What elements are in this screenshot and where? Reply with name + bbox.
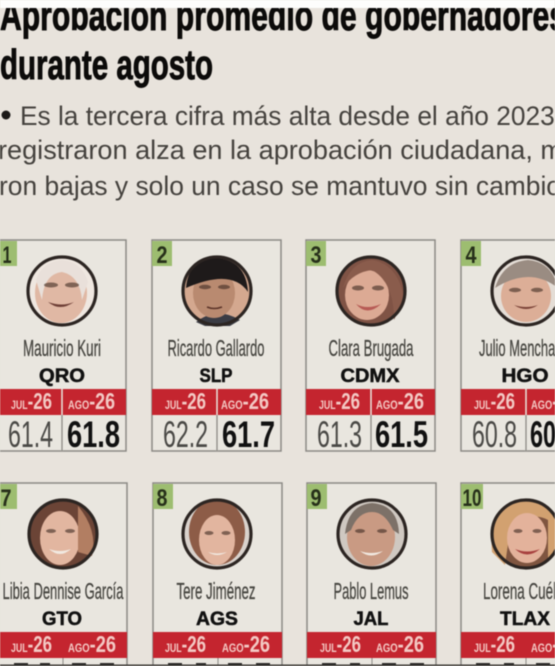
panel: rank 2 Ricardo Gallardo: SLP — [200, 366, 233, 387]
panel: rank 10 Lorena Cuéllar: JUL-26 — [474, 631, 515, 657]
icon: portrait Lorena Cuéllar — [492, 500, 555, 568]
panel: rank 2 Ricardo Gallardo: 2 — [156, 242, 168, 269]
panel: rank 3 Clara Brugada: 61.5 — [375, 414, 428, 455]
panel: rank 9 Pablo Lemus: 9 — [310, 485, 322, 512]
panel: rank 1 Mauricio Kuri: AGO-26 — [68, 388, 115, 414]
title: durante agosto — [0, 41, 213, 88]
panel: rank 4 Julio Menchaca: 60.8 — [472, 414, 517, 455]
panel: rank 8 Tere Jiménez: Tere Jiménez — [176, 578, 256, 604]
panel: rank 8 Tere Jiménez: AGS — [196, 609, 238, 630]
panel: rank 8 Tere Jiménez — [153, 483, 282, 666]
panel: rank 7 Libia Dennise García: JUL-26 — [11, 631, 52, 657]
panel: rank 8 Tere Jiménez: JUL-26 — [165, 631, 206, 657]
icon: portrait Julio Menchaca — [492, 257, 555, 325]
icon: portrait Libia Dennise García — [29, 500, 97, 568]
panel: rank 9 Pablo Lemus: AGO-26 — [376, 631, 424, 657]
icon: portrait Mauricio Kuri — [28, 257, 96, 325]
panel: rank 4 Julio Menchaca: HGO — [502, 366, 548, 387]
panel: rank 2 Ricardo Gallardo: JUL-26 — [165, 388, 206, 414]
panel: rank 7 Libia Dennise García: GTO — [42, 609, 82, 630]
icon: portrait Ricardo Gallardo — [183, 257, 251, 326]
panel: rank 8 Tere Jiménez: 8 — [156, 485, 168, 512]
panel: rank 4 Julio Menchaca: 4 — [466, 242, 477, 269]
panel: rank 9 Pablo Lemus: Pablo Lemus — [334, 578, 408, 604]
panel: rank 4 Julio Menchaca — [461, 240, 555, 455]
panel: rank 1 Mauricio Kuri: 1 — [2, 242, 12, 269]
icon: portrait Tere Jiménez — [183, 499, 251, 568]
panel: rank 2 Ricardo Gallardo: 62.2 — [163, 414, 208, 455]
panel: rank 3 Clara Brugada: 61.3 — [317, 414, 362, 455]
panel: rank 3 Clara Brugada: AGO-26 — [376, 388, 424, 414]
title — [0, 0, 555, 88]
panel: rank 9 Pablo Lemus — [307, 483, 436, 666]
panel: rank 1 Mauricio Kuri — [0, 240, 126, 455]
panel: rank 1 Mauricio Kuri: JUL-26 — [11, 388, 52, 414]
icon: portrait Pablo Lemus — [338, 500, 406, 568]
panel: rank 3 Clara Brugada: JUL-26 — [319, 388, 360, 414]
panel: rank 10 Lorena Cuéllar: TLAX — [500, 609, 550, 630]
panel: rank 3 Clara Brugada: CDMX — [340, 366, 400, 387]
panel: rank 8 Tere Jiménez: AGO-26 — [222, 631, 270, 657]
panel: rank 2 Ricardo Gallardo: 61.7 — [222, 414, 275, 455]
intro text block: registraron alza en la aprobación ciudadana, m — [0, 135, 555, 165]
panel: rank 2 Ricardo Gallardo: AGO-26 — [221, 388, 269, 414]
panel: rank 3 Clara Brugada — [306, 240, 435, 455]
panel: rank 1 Mauricio Kuri: QRO — [39, 366, 85, 387]
panel: rank 10 Lorena Cuéllar — [461, 483, 555, 666]
panel: rank 4 Julio Menchaca: JUL-26 — [474, 388, 515, 414]
panel: rank 3 Clara Brugada: Clara Brugada — [328, 335, 414, 361]
panel: rank 3 Clara Brugada: 3 — [310, 242, 322, 269]
panel: rank 9 Pablo Lemus: JUL-26 — [320, 631, 361, 657]
panel: rank 7 Libia Dennise García: Libia Dennise García — [2, 578, 124, 604]
icon: portrait Clara Brugada — [337, 257, 405, 325]
panel: rank 1 Mauricio Kuri: 61.8 — [67, 414, 120, 455]
panel: rank 7 Libia Dennise García: 7 — [0, 485, 12, 512]
panel: rank 2 Ricardo Gallardo — [152, 240, 281, 455]
panel: rank 2 Ricardo Gallardo: Ricardo Gallardo — [168, 335, 264, 361]
panel: rank 7 Libia Dennise García: AGO-26 — [68, 631, 116, 657]
intro text block — [0, 101, 555, 201]
panel: rank 1 Mauricio Kuri: 61.4 — [8, 414, 53, 455]
panel: rank 10 Lorena Cuéllar: 10 — [462, 485, 482, 512]
panel: rank 9 Pablo Lemus: JAL — [354, 609, 389, 630]
panel: rank 1 Mauricio Kuri: Mauricio Kuri — [23, 335, 101, 361]
panel: rank 7 Libia Dennise García — [0, 483, 127, 666]
